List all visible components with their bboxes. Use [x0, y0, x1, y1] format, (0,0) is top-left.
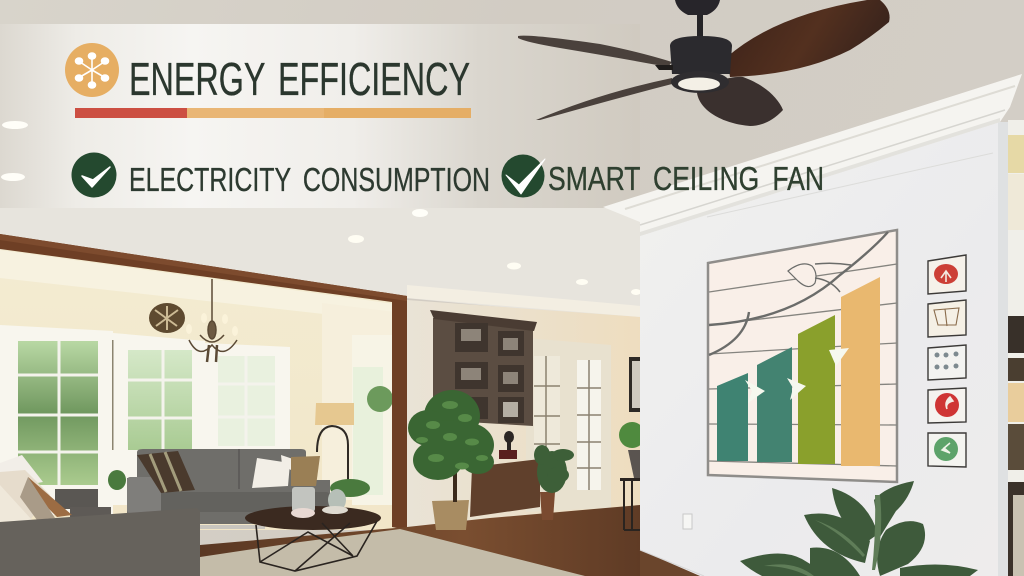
left windows — [0, 325, 290, 515]
hanging plant — [367, 386, 393, 412]
French doors — [526, 338, 611, 512]
banner spotlights — [1, 121, 428, 217]
console table with vase — [470, 431, 540, 517]
chart bar 3 — [798, 315, 835, 464]
framed picture — [629, 357, 641, 412]
back sofa — [127, 449, 330, 529]
wall art bar chart — [708, 230, 897, 482]
left armchair — [0, 455, 200, 576]
floor — [200, 505, 640, 576]
fan blade: left upper — [518, 36, 672, 67]
coffee table — [245, 487, 381, 571]
title underline bar — [75, 108, 471, 118]
small wall icon frames — [928, 255, 966, 467]
foreground plant — [740, 481, 978, 576]
floor lamp — [315, 403, 354, 490]
chart bar 2 — [757, 347, 792, 462]
chart bar 1 — [717, 373, 748, 461]
rear hallway wall — [407, 285, 641, 530]
label: smart ceiling fan: SMART CEILING FAN — [548, 160, 824, 197]
area rug — [200, 529, 585, 576]
frame: green arrow icon — [928, 433, 966, 467]
potted tree — [408, 390, 494, 530]
fan blade: left lower — [536, 78, 672, 120]
frame: red crescent icon — [928, 388, 966, 423]
striped cushion — [137, 451, 195, 493]
fan blade: large wood — [727, 0, 890, 77]
frame: sketch basket icon — [928, 300, 966, 337]
side table with plant — [619, 422, 645, 530]
wooden ceiling beam — [0, 234, 407, 530]
chart arrows — [745, 348, 849, 403]
chart bar 4 — [841, 277, 880, 466]
label: electricity consumption: ELECTRICITY CONSUMPTION — [129, 161, 490, 198]
check icon: electricity — [72, 152, 116, 198]
left living room wall — [0, 246, 395, 530]
title: ENERGY EFFICIENCY — [129, 53, 470, 105]
title icon — [65, 43, 119, 97]
chart swoosh lines — [709, 232, 888, 355]
fan motor — [655, 0, 732, 93]
frame: dot grid icon — [928, 345, 966, 380]
wall ornament — [149, 303, 185, 333]
frame: red umbrella icon — [928, 255, 966, 294]
chandelier — [186, 279, 238, 362]
fan blade: lower — [697, 77, 783, 126]
banner panel — [0, 24, 640, 208]
recessed ceiling lights — [348, 235, 641, 295]
right doorway interior — [1008, 120, 1024, 576]
check icon: smart fan — [502, 154, 545, 198]
small corner plant — [534, 445, 574, 520]
floor plant by sofa — [108, 470, 370, 497]
ceiling fan — [518, 0, 890, 126]
crown molding — [603, 74, 1022, 236]
rear room ceiling — [0, 208, 640, 320]
right feature wall — [640, 122, 1008, 576]
wall cabinet — [430, 310, 537, 426]
